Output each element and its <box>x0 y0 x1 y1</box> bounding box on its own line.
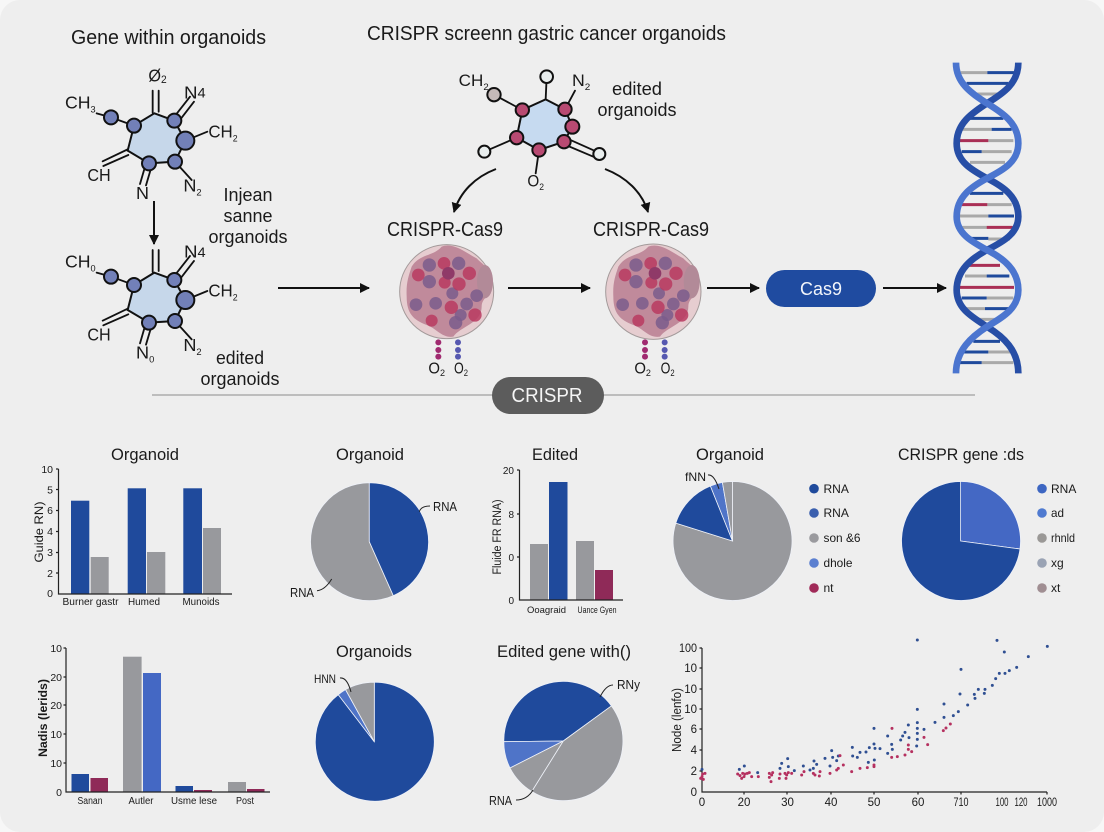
panel: pie CRISPR genes with legend <box>898 445 1076 600</box>
tick labels: 10 <box>50 758 62 770</box>
caption: edited organoids left: organoids <box>200 369 280 389</box>
molecule: top left: 2 <box>161 74 167 86</box>
pie label <box>708 475 719 489</box>
legend: nt <box>824 581 834 595</box>
x tick labels: 20 <box>738 797 750 809</box>
axes <box>517 470 623 600</box>
x tick labels: 60 <box>912 797 924 809</box>
tick labels: 5 <box>47 484 53 496</box>
organoid: right: 2 <box>670 368 675 378</box>
axis title: Node (lenfo) <box>670 688 684 752</box>
legend <box>809 482 861 595</box>
molecule: top left: Ø <box>148 66 162 86</box>
y tick labels: 10 <box>684 684 697 696</box>
panel: bar chart Edited <box>492 445 623 616</box>
caption: injean sanne organoids: Injean <box>224 185 272 205</box>
category labels: Usme lese <box>171 796 217 807</box>
molecule: lower left: 0 <box>91 264 96 274</box>
molecule: lower left: 2 <box>233 293 238 303</box>
y tick labels: 0 <box>691 787 697 799</box>
panel: bar chart Organoid <box>32 445 232 608</box>
tick labels <box>50 643 62 799</box>
axis title: Guide RN) <box>32 502 46 562</box>
panel: pie Organoid <box>290 445 457 601</box>
organoid: right <box>606 244 701 378</box>
molecule: lower left: 4 <box>198 244 206 260</box>
organoid: left: 2 <box>464 368 468 378</box>
divider line <box>152 394 975 396</box>
arrow: to DNA <box>883 287 946 289</box>
pill: Cas9 <box>766 270 876 307</box>
tick labels: 10 <box>50 643 62 655</box>
caption: injean sanne organoids: organoids <box>208 227 288 247</box>
x tick labels: 50 <box>868 797 880 809</box>
legend: xt <box>1051 581 1061 595</box>
molecule: top center: 2 <box>539 182 544 192</box>
tick labels: 6 <box>47 505 53 517</box>
panel: pie Edited gene <box>489 642 641 808</box>
tick labels: 20 <box>503 466 514 477</box>
axis title: Fluide FR RNA) <box>492 499 504 574</box>
panel: scatter plot <box>670 640 1057 809</box>
bars <box>71 488 221 594</box>
organoid: left: 2 <box>440 368 445 378</box>
arrow: curved right <box>605 169 648 212</box>
tick labels: 0 <box>56 787 62 799</box>
legend: xg <box>1051 556 1064 570</box>
arrow: between organoids <box>508 287 590 289</box>
tick labels: 0 <box>508 553 514 564</box>
legend: RNA <box>824 482 849 496</box>
caption: edited organoids center: edited <box>612 79 662 99</box>
panel: pie Organoids: HNN <box>314 672 336 686</box>
organoid: right: O <box>634 360 646 377</box>
molecule: lower left <box>65 242 238 364</box>
molecule: lower left: 0 <box>149 354 154 364</box>
caption: edited organoids center <box>598 79 676 120</box>
molecule: lower left: CH <box>65 252 91 272</box>
arrow: curved left <box>454 169 496 212</box>
legend: RNA <box>824 506 849 520</box>
x tick labels: 40 <box>825 797 837 809</box>
bars <box>530 482 613 600</box>
legend: RNA <box>1051 482 1076 496</box>
panel: bar chart lower left <box>36 643 270 807</box>
tick labels: 4 <box>47 526 53 538</box>
y tick labels <box>679 643 698 799</box>
y tick labels: 10 <box>684 663 697 675</box>
caption: injean sanne organoids: sanne <box>224 206 272 226</box>
pie <box>311 483 429 601</box>
tick labels: 0 <box>47 588 53 600</box>
molecule: top left: 3 <box>91 104 96 114</box>
category labels: Sanan <box>78 796 102 807</box>
y tick labels: 6 <box>691 724 697 736</box>
heading: CRISPR gene :ds <box>898 445 1024 464</box>
tick labels: 2 <box>47 568 53 580</box>
pill: CRISPR <box>492 377 604 414</box>
molecule: top left <box>65 66 238 203</box>
molecule: lower left: CH <box>87 324 111 344</box>
heading: Organoid <box>696 445 764 464</box>
label: CRISPR-Cas9 right: CRISPR-Cas9 <box>593 219 709 241</box>
x tick labels: 1000 <box>1037 797 1057 809</box>
category labels: Uance Gyen <box>578 605 616 616</box>
data points <box>701 640 1047 782</box>
axes <box>64 648 270 792</box>
legend: ad <box>1051 506 1064 520</box>
caption: injean sanne organoids <box>208 185 288 247</box>
organoid: left: O <box>454 360 466 377</box>
pie label <box>340 678 351 692</box>
molecule: top left: CH <box>87 165 111 185</box>
category labels <box>527 605 616 616</box>
heading: Edited <box>532 445 578 464</box>
molecule: top left: 2 <box>233 133 238 143</box>
x tick labels <box>699 797 1057 809</box>
x tick labels: 0 <box>699 797 705 809</box>
title: gene within organoids: Gene within organoids <box>71 27 266 49</box>
category labels <box>78 796 254 807</box>
panel: pie Edited gene: RNy <box>617 678 641 692</box>
bars <box>72 657 264 792</box>
tick labels: 20 <box>50 672 62 684</box>
molecule: top center: O <box>527 172 540 191</box>
x tick labels: 100 <box>996 797 1008 809</box>
panel: pie Organoid: RNA <box>433 499 457 514</box>
panel: pie Organoid: RNA <box>290 585 314 600</box>
label: CRISPR-Cas9 left: CRISPR-Cas9 <box>387 219 503 241</box>
pill: Cas9: Cas9 <box>800 279 842 299</box>
heading: Organoid <box>336 445 404 464</box>
organoid: left <box>400 245 494 378</box>
organoid: left: O <box>428 360 440 377</box>
molecule: top center: 2 <box>585 82 590 92</box>
icon: DNA helix <box>956 63 1018 373</box>
category labels: Ooagraid <box>527 605 566 616</box>
molecule: top left: N <box>184 82 197 102</box>
caption: edited organoids center: organoids <box>598 100 676 120</box>
molecule: top left: N <box>183 176 196 196</box>
pill: CRISPR: CRISPR <box>512 385 582 407</box>
tick labels: 3 <box>47 547 53 559</box>
molecule: top center: CH <box>459 71 483 90</box>
pie <box>504 681 623 801</box>
molecule: lower left: N <box>136 342 149 362</box>
category labels: Post <box>236 796 254 807</box>
panel: pie Organoid with legend <box>673 445 861 600</box>
category labels: Humed <box>128 597 160 608</box>
arrow: down <box>153 201 155 244</box>
tick labels: 8 <box>508 510 514 521</box>
molecule: top left: N <box>136 183 149 203</box>
molecule: top center <box>459 70 605 192</box>
heading: Edited gene with() <box>497 642 631 661</box>
heading: Organoid <box>111 445 179 464</box>
molecule: lower left: N <box>184 242 197 262</box>
arrow: to first organoid <box>278 287 369 289</box>
axes <box>700 648 1047 794</box>
molecule: top left: CH <box>65 92 91 112</box>
y tick labels: 2 <box>691 766 697 778</box>
molecule: lower left: CH <box>208 281 234 301</box>
heading: Organoids <box>336 642 412 661</box>
caption: edited organoids left <box>200 348 280 389</box>
tick labels <box>41 464 53 600</box>
tick labels: 10 <box>41 464 53 476</box>
organoid: right: O <box>661 360 673 377</box>
axes <box>56 469 232 594</box>
y tick labels: 4 <box>691 745 698 757</box>
molecule: top left: CH <box>208 121 234 141</box>
molecule: top left: 2 <box>196 188 202 198</box>
pie <box>902 481 1021 600</box>
molecule: top center: N <box>572 71 584 90</box>
category labels: Autler <box>128 796 154 807</box>
x tick labels: 30 <box>781 797 794 809</box>
tick labels: 10 <box>50 729 62 741</box>
x tick labels: 710 <box>954 797 968 809</box>
title: CRISPR screen: CRISPR screenn gastric cancer organoids <box>367 23 726 45</box>
x tick labels: 120 <box>1014 797 1028 809</box>
tick labels: 0 <box>508 596 514 607</box>
molecule: top center: 2 <box>483 82 489 92</box>
panel: pie Organoid with legend: fNN <box>685 470 706 484</box>
arrow: to Cas9 <box>707 287 759 289</box>
molecule: top left: 4 <box>198 85 206 101</box>
panel: pie Edited gene: RNA <box>489 794 513 808</box>
tick labels <box>503 466 514 607</box>
molecule: lower left: 2 <box>196 347 202 357</box>
organoid: right: 2 <box>646 368 651 378</box>
legend: rhnld <box>1051 531 1075 545</box>
panel: pie Organoids <box>314 642 434 801</box>
legend: son &6 <box>824 531 861 545</box>
pie labels <box>516 685 613 800</box>
category labels <box>62 597 220 608</box>
y tick labels: 10 <box>684 704 697 716</box>
y tick labels: 100 <box>679 643 697 655</box>
pie <box>315 682 434 801</box>
category labels: Burner gastr <box>62 597 119 608</box>
legend: dhole <box>824 556 853 570</box>
legend <box>1037 482 1076 595</box>
tick labels: 20 <box>50 700 62 712</box>
molecule: lower left: N <box>183 335 196 355</box>
axis title: Nadis (lerids) <box>36 679 50 757</box>
caption: edited organoids left: edited <box>216 348 264 368</box>
category labels: Munoids <box>182 597 220 608</box>
pie <box>673 482 792 600</box>
pie labels <box>317 506 430 591</box>
